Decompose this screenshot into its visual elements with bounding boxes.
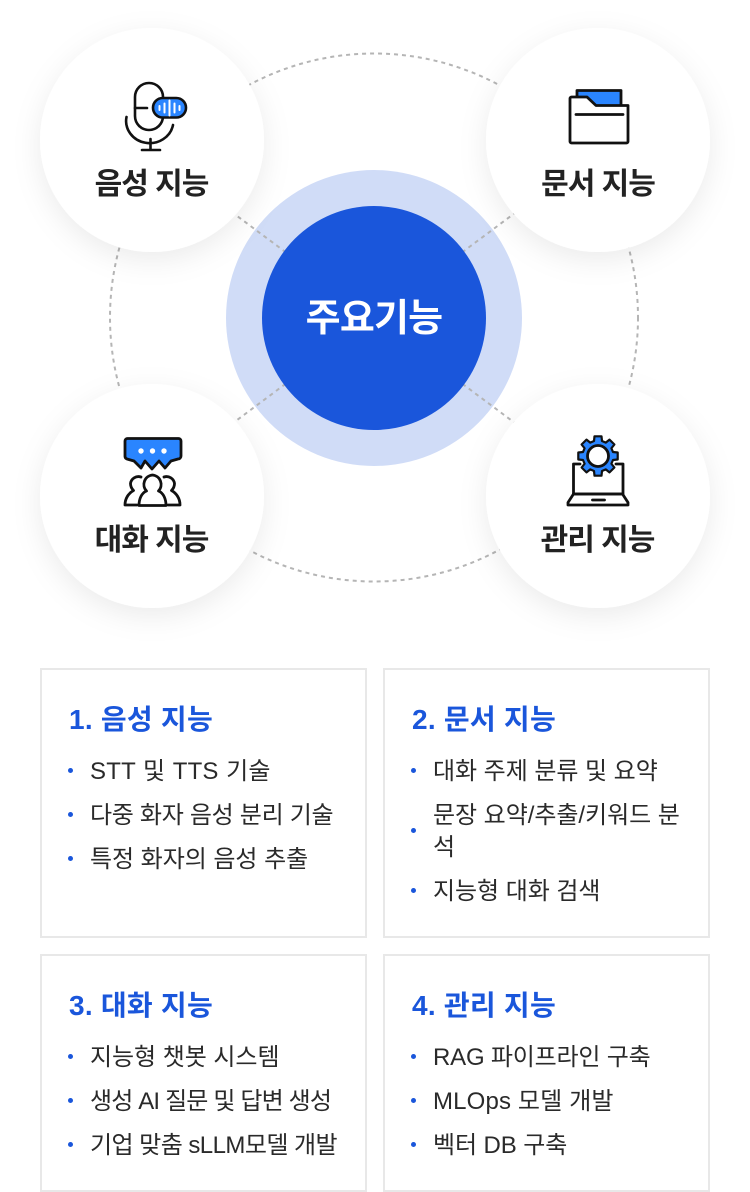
heading: 4. 관리 지능 [412, 990, 556, 1021]
hub title: 주요기능 [306, 298, 442, 340]
list item: 석 [433, 834, 455, 861]
list item: 다중 화자 음성 분리 기술 [90, 802, 333, 829]
label: 대화 지능 [95, 524, 209, 557]
heading: 2. 문서 지능 [412, 704, 556, 735]
outer hub ring [226, 170, 522, 466]
list item: 지능형 챗봇 시스템 [90, 1044, 279, 1071]
heading: 1. 음성 지능 [69, 704, 213, 735]
icon: gear over laptop [568, 436, 628, 505]
center hub [262, 206, 486, 430]
panel: conversation intelligence [40, 954, 367, 1192]
icon: speech bubble and people [125, 438, 181, 506]
panel: voice intelligence [40, 668, 367, 938]
list item: MLOps 모델 개발 [433, 1088, 614, 1115]
dashed connectors [225, 207, 523, 429]
list item: 기업 맞춤 sLLM모델 개발 [90, 1132, 337, 1159]
label: 관리 지능 [541, 524, 655, 557]
list item: RAG 파이프라인 구축 [433, 1044, 651, 1071]
node: voice intelligence [40, 28, 264, 252]
label: 음성 지능 [95, 168, 209, 201]
node: document intelligence [486, 28, 710, 252]
list item: 벡터 DB 구축 [433, 1132, 567, 1159]
heading: 3. 대화 지능 [69, 990, 213, 1021]
dashed orbit [110, 54, 638, 582]
node: conversation intelligence [40, 384, 264, 608]
icon: folder [570, 90, 628, 143]
panel: document intelligence [383, 668, 710, 938]
list item [433, 802, 680, 861]
list item: 특정 화자의 음성 추출 [90, 846, 308, 873]
node: management intelligence [486, 384, 710, 608]
list item: 지능형 대화 검색 [433, 878, 600, 905]
panel: management intelligence [383, 954, 710, 1192]
feature diagram [38, 52, 712, 618]
list item: 생성 AI 질문 및 답변 생성 [90, 1088, 331, 1115]
list item: 대화 주제 분류 및 요약 [433, 758, 658, 785]
list item: STT 및 TTS 기술 [90, 758, 271, 785]
label: 문서 지능 [541, 168, 655, 201]
list item: 문장 요약/추출/키워드 분 [433, 802, 680, 829]
icon: microphone [126, 83, 186, 150]
